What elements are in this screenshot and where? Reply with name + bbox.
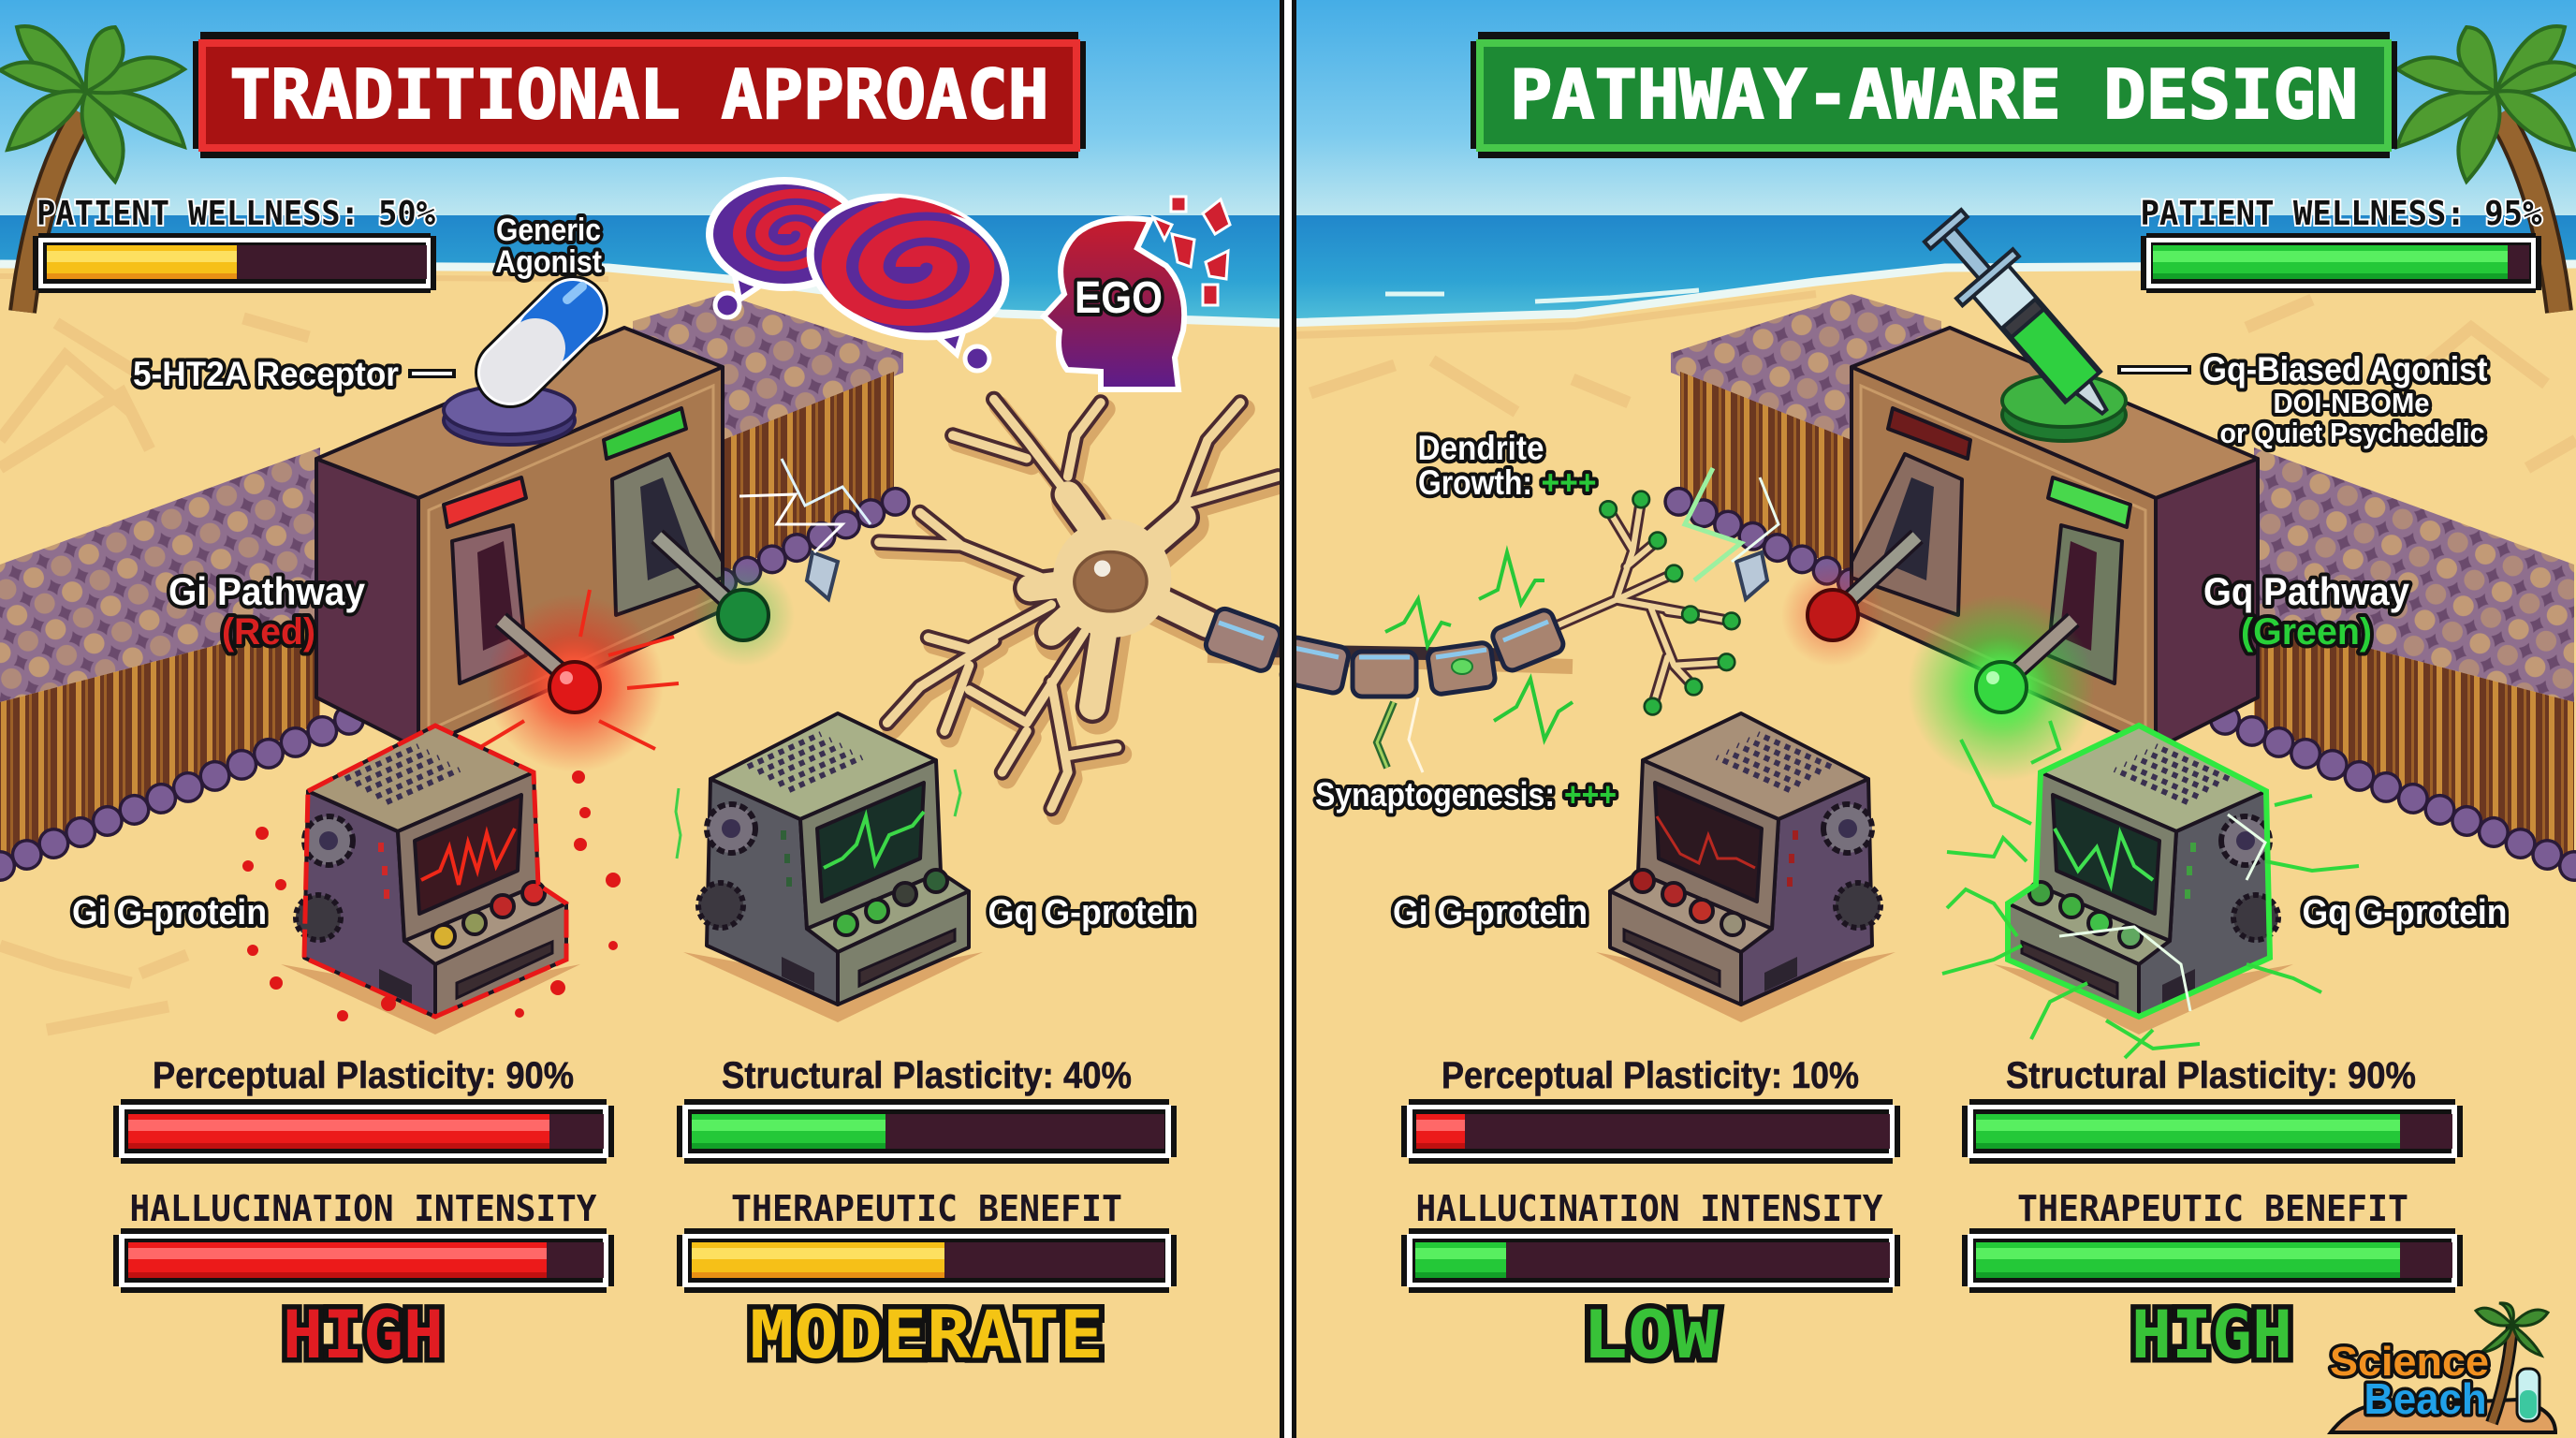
- verdict: low hallucination: LOW: [1582, 1297, 1719, 1373]
- axon: myelin capsule chain: [1204, 607, 1573, 697]
- shoreline foam: [0, 264, 2576, 323]
- title text: PATHWAY-AWARE DESIGN: [1510, 55, 2358, 134]
- title banner right: [1471, 32, 2397, 158]
- sand dune streaks: [0, 276, 2576, 1030]
- label: Gq pathway: [2203, 569, 2410, 653]
- lever: red active, left panel: [477, 590, 679, 772]
- label: dendrite growth: [1417, 429, 1597, 502]
- label: synaptogenesis: Synaptogenesis:: [1315, 775, 1555, 814]
- metric: perceptual plasticity right: [1401, 1055, 1900, 1164]
- machine: Gq G-protein left, calm: [676, 713, 983, 1022]
- membrane wall left: [0, 294, 903, 866]
- label: Gi G-protein left: Gi G-protein: [72, 893, 267, 932]
- metric: perceptual plasticity right: Perceptual Plasticity: 10%: [1442, 1055, 1859, 1096]
- label: dendrite growth: +++: [1541, 463, 1597, 502]
- background: sky: [0, 0, 2576, 225]
- label: Gq G-protein left: Gq G-protein: [988, 893, 1194, 932]
- verdict: high benefit: HIGH: [2131, 1297, 2292, 1373]
- icon: syringe agonist: [1914, 201, 2132, 441]
- label: synaptogenesis: +++: [1564, 775, 1617, 814]
- sea foam streaks: [1385, 290, 1769, 301]
- label: Gi pathway: (Red): [222, 611, 315, 653]
- label: generic agonist: [495, 213, 602, 280]
- thought bubble: spiral one: [710, 181, 859, 317]
- thought bubble: spiral two: [807, 193, 1009, 373]
- metric: hallucination intensity left: [113, 1188, 614, 1293]
- lever: green active, right panel: [1908, 594, 2095, 782]
- verdict: moderate benefit: MODERATE: [750, 1297, 1104, 1373]
- neuron: left cell body and dendrites: [879, 399, 1283, 814]
- label: generic agonist: Generic: [496, 213, 601, 248]
- membrane wall right: [1671, 294, 2574, 866]
- label: Gq-biased agonist with leader: [2117, 350, 2488, 449]
- right synapse terminal and green sparks: [1685, 468, 1778, 599]
- logo: Science Beach: Beach: [2364, 1374, 2486, 1423]
- title text: TRADITIONAL APPROACH: [230, 55, 1048, 134]
- left synapse terminal and sparks: [739, 459, 871, 599]
- metric: structural plasticity right: Structural Plasticity: 90%: [2006, 1055, 2416, 1096]
- label: Gq pathway: (Green): [2241, 611, 2372, 653]
- metric: therapeutic benefit left: THERAPEUTIC BENEFIT: [731, 1188, 1122, 1229]
- lever: red idle, right panel: [1781, 536, 1917, 667]
- icon: pill agonist: [444, 286, 582, 445]
- machine: Gq G-protein right, energized: [1942, 721, 2359, 1058]
- metric: structural plasticity left: Structural Plasticity: 40%: [722, 1055, 1132, 1096]
- logo: Science Beach: Science: [2330, 1339, 2489, 1385]
- palm tree left: [0, 26, 184, 312]
- switch box right: [1852, 328, 2258, 749]
- wellness bar right: [2140, 195, 2542, 293]
- label: Gi pathway: Gi Pathway: [168, 569, 366, 613]
- machine: Gi G-protein left, overloaded: [242, 726, 621, 1034]
- label: PATIENT WELLNESS: 50%: [37, 195, 435, 233]
- metric: therapeutic benefit left: [677, 1188, 1177, 1293]
- label: PATIENT WELLNESS: 95%: [2140, 195, 2542, 233]
- label: Gq-biased agonist with leader: DOI-NBOMe: [2273, 387, 2430, 419]
- metric: hallucination intensity right: [1401, 1188, 1900, 1293]
- metric: perceptual plasticity left: [113, 1055, 614, 1164]
- metric: perceptual plasticity left: Perceptual Plasticity: 90%: [153, 1055, 574, 1096]
- label: Gq pathway: Gq Pathway: [2203, 569, 2410, 613]
- metric: structural plasticity right: [1962, 1055, 2463, 1164]
- verdict: high hallucination: HIGH: [283, 1297, 444, 1373]
- label: dendrite growth: Dendrite: [1417, 429, 1544, 467]
- EGO label: EGO: [1075, 273, 1163, 323]
- green ECG pulses and synapse sprout: [1377, 552, 1573, 772]
- label: generic agonist: Agonist: [495, 244, 602, 280]
- vertical divider: [1280, 0, 1296, 1438]
- metric: hallucination intensity left: HALLUCINATION INTENSITY: [129, 1188, 597, 1229]
- label: Gi pathway: [168, 569, 366, 653]
- wellness bar left: [33, 195, 436, 293]
- label: Gi G-protein right: Gi G-protein: [1393, 893, 1588, 932]
- metric: structural plasticity left: [677, 1055, 1177, 1164]
- background: sea: [0, 215, 2576, 346]
- icon: fragmenting head: [1044, 197, 1230, 389]
- title banner left: [193, 32, 1086, 158]
- label: Gq-biased agonist with leader: Gq-Biased Agonist: [2202, 350, 2488, 389]
- label: dendrite growth: Growth:: [1418, 463, 1532, 502]
- metric: hallucination intensity right: HALLUCINATION INTENSITY: [1415, 1188, 1883, 1229]
- machine: Gi G-protein right, quiet: [1596, 713, 1895, 1022]
- metric: therapeutic benefit right: THERAPEUTIC BENEFIT: [2017, 1188, 2408, 1229]
- label: Gq-biased agonist with leader: or Quiet Psychedelic: [2220, 417, 2484, 449]
- switch box left: [316, 328, 723, 749]
- palm tree right: [2397, 26, 2576, 312]
- logo: Science Beach: [2330, 1303, 2555, 1432]
- lever: green idle, left panel: [657, 536, 795, 667]
- metric: therapeutic benefit right: [1962, 1188, 2463, 1293]
- label: 5-HT2A receptor with leader: 5-HT2A Receptor: [133, 355, 399, 393]
- label: Gq G-protein right: Gq G-protein: [2303, 893, 2507, 932]
- neuron: right dendrite tree with growth buds: [1552, 492, 1740, 714]
